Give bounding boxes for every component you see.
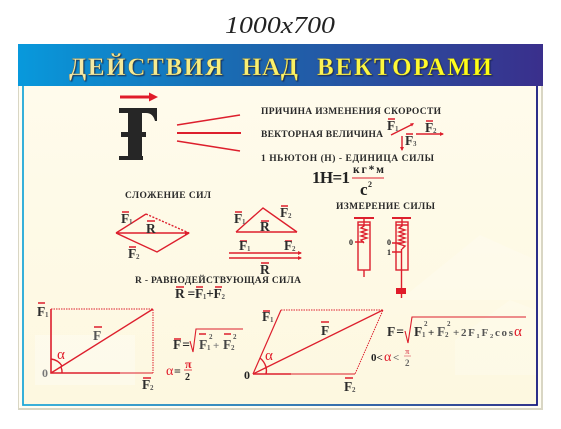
right angle force rectangle (37, 303, 154, 392)
resultant formula: R =F (175, 286, 203, 301)
small vector diagram: 3 (413, 140, 417, 148)
resultant force caption: R - РАВНОДЕЙСТВУЮЩАЯ СИЛА (135, 274, 301, 286)
parallelogram diagram: 2 (352, 386, 356, 394)
parallelogram diagram: F (321, 323, 329, 338)
spring scale unloaded: 0 (349, 238, 353, 247)
small vector diagram (387, 118, 444, 151)
rhombus addition diagram: F (121, 211, 129, 226)
formula: alpha equals pi over two: α (166, 364, 174, 379)
triangle addition diagram: F (280, 205, 288, 220)
triangle addition diagram (234, 205, 297, 234)
big F with arrow (119, 92, 158, 160)
collinear addition diagram (229, 238, 302, 277)
collinear addition diagram: R (260, 262, 270, 277)
formula: right angle magnitude: + (213, 340, 219, 352)
parallelogram diagram: F (262, 309, 270, 324)
parallelogram diagram (244, 309, 383, 394)
formula: right angle magnitude: 2 (231, 344, 235, 352)
formula: alpha equals pi over two: 2 (185, 372, 190, 383)
collinear addition diagram: F (239, 238, 247, 253)
formula: general magnitude: F (414, 324, 422, 339)
formula: general magnitude: F = (387, 324, 404, 339)
triangle addition diagram: 2 (288, 212, 292, 220)
collinear addition diagram: 2 (292, 245, 296, 253)
formula: general magnitude: 2 (424, 320, 428, 328)
heading: force addition: СЛОЖЕНИЕ СИЛ (125, 191, 211, 201)
spring scale unloaded (349, 218, 374, 277)
size caption: 1000x700 (225, 13, 335, 39)
small vector diagram: F (425, 120, 433, 135)
definitions text: ПРИЧИНА ИЗМЕНЕНИЯ СКОРОСТИ (261, 107, 442, 117)
parallelogram diagram: 1 (270, 316, 274, 324)
unit formula: с (360, 180, 368, 199)
formula: right angle magnitude: 2 (233, 333, 237, 341)
inequality for alpha: < (393, 352, 399, 364)
small vector diagram: 1 (395, 125, 399, 133)
branching lines (177, 115, 241, 151)
small vector diagram: F (405, 133, 413, 148)
inequality for alpha (371, 347, 411, 368)
inequality for alpha: 2 (405, 358, 410, 368)
right angle force rectangle: F (142, 377, 150, 392)
definitions text (261, 107, 442, 164)
triangle addition diagram: F (234, 211, 242, 226)
rhombus addition diagram: R (146, 221, 156, 236)
right angle force rectangle: F (93, 328, 101, 343)
formula: right angle magnitude: 2 (209, 333, 213, 341)
inequality for alpha: 0< (371, 352, 383, 364)
parallelogram diagram: 0 (244, 368, 250, 382)
title: ДЕЙСТВИЯ (69, 53, 223, 81)
rhombus addition diagram (116, 211, 190, 261)
resultant formula: 2 (222, 293, 226, 301)
formula: right angle magnitude (173, 329, 243, 352)
rhombus addition diagram: F (128, 246, 136, 261)
resultant formula: +F (206, 286, 222, 301)
formula: general magnitude: 2 (447, 320, 451, 328)
formula: general magnitude: α (514, 324, 522, 340)
unit formula: 1Н=1 (312, 168, 350, 187)
heading: force measurement: ИЗМЕРЕНИЕ СИЛЫ (336, 202, 436, 212)
resultant formula: 1 (203, 293, 207, 301)
spring scale loaded: 1 (387, 248, 391, 257)
triangle addition diagram: 1 (242, 218, 246, 226)
right angle force rectangle: α (57, 347, 65, 363)
arrow (120, 92, 158, 102)
big letter F (119, 108, 157, 160)
unit formula: 2 (368, 180, 372, 189)
right angle force rectangle: 2 (150, 384, 154, 392)
definitions text: ВЕКТОРНАЯ ВЕЛИЧИНА (261, 130, 383, 140)
parallelogram diagram: F (344, 379, 352, 394)
small vector diagram: 2 (433, 127, 437, 135)
title: НАД (242, 54, 298, 81)
title banner (18, 44, 543, 86)
inequality for alpha: α (384, 350, 392, 365)
rhombus addition diagram: 2 (136, 253, 140, 261)
formula: alpha equals pi over two: π (185, 357, 192, 371)
formula: general magnitude: + (428, 327, 434, 339)
formula: right angle magnitude: F = (173, 337, 190, 352)
formula: general magnitude: 1 (422, 331, 426, 339)
resultant formula (175, 286, 226, 301)
spring scale loaded: 0 (387, 238, 391, 247)
unit formula: кг*м (353, 164, 384, 176)
collinear addition diagram: F (284, 238, 292, 253)
spring scale loaded (387, 218, 411, 298)
formula: right angle magnitude: F (223, 337, 231, 352)
right angle force rectangle: 0 (42, 366, 48, 380)
formula: right angle magnitude: F (199, 337, 207, 352)
right angle force rectangle: F (37, 304, 45, 319)
unit formula (312, 164, 384, 199)
formula: general magnitude: 2 (445, 331, 449, 339)
definitions text: 1 НЬЮТОН (Н) - ЕДИНИЦА СИЛЫ (261, 153, 435, 164)
title: ВЕКТОРАМИ (317, 54, 493, 81)
panel background (18, 86, 543, 410)
parallelogram diagram: α (265, 348, 273, 364)
formula: general magnitude: +2F₁F₂cos (453, 327, 514, 339)
formula: general magnitude: F (437, 324, 445, 339)
formula: alpha equals pi over two (166, 357, 192, 383)
collinear addition diagram: 1 (247, 245, 251, 253)
formula: alpha equals pi over two: = (174, 364, 181, 378)
inequality for alpha: π (405, 347, 410, 356)
right angle force rectangle: 1 (45, 311, 49, 319)
formula: general magnitude (387, 317, 526, 343)
small vector diagram: F (387, 118, 395, 133)
rhombus addition diagram: 1 (129, 218, 133, 226)
formula: right angle magnitude: 1 (207, 344, 211, 352)
triangle addition diagram: R (260, 219, 270, 234)
